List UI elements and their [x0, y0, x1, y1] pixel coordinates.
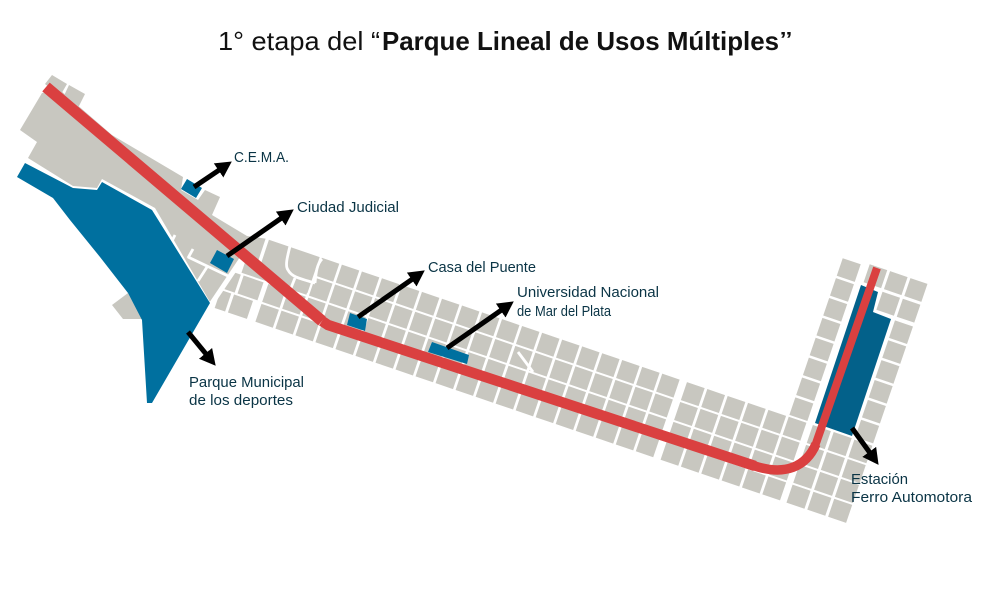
label: Universidad Nacional de Mar del Plata: Universidad Nacional — [517, 284, 659, 301]
label: Ciudad Judicial: Ciudad Judicial — [297, 199, 399, 216]
label: Estación Ferro Automotora: Estación — [851, 471, 908, 488]
blocks: northwest area — [20, 75, 268, 319]
map: urban fabric blocks — [20, 69, 927, 523]
arrow: Casa del Puente — [358, 278, 413, 317]
panel: Parque Municipal de los deportes area — [17, 163, 210, 403]
label: Estación Ferro Automotora — [851, 471, 973, 506]
label: Parque Municipal de los deportes — [189, 374, 304, 409]
label: Parque Municipal de los deportes: de los deportes — [189, 392, 293, 409]
arrow: Ciudad Judicial — [227, 217, 282, 256]
arrow: Universidad Nacional — [447, 309, 502, 348]
site: Ciudad Judicial — [210, 250, 234, 273]
arrow: Parque Municipal — [188, 332, 207, 355]
label: Estación Ferro Automotora: Ferro Automotora — [851, 489, 973, 506]
blocks: street grid — [215, 69, 927, 523]
title — [218, 26, 792, 56]
streets: white cuts — [172, 235, 533, 372]
label: Parque Municipal de los deportes: Parque Municipal — [189, 374, 304, 391]
title: Parque Lineal de Usos Múltiples — [382, 26, 779, 56]
arrow: C.E.M.A. — [194, 169, 220, 187]
title: 1° etapa del “ — [218, 26, 380, 56]
site: Universidad Nacional — [428, 342, 469, 364]
label: Casa del Puente: Casa del Puente — [428, 259, 536, 276]
label: Universidad Nacional de Mar del Plata — [517, 284, 659, 320]
arrow: Estación — [852, 428, 870, 454]
site: C.E.M.A. — [181, 179, 202, 198]
site: Casa del Puente — [347, 313, 367, 331]
panel: Estación Ferro Automotora area — [815, 285, 891, 436]
park route: red line — [46, 87, 877, 470]
label: C.E.M.A.: C.E.M.A. — [234, 149, 289, 166]
title: ” — [780, 26, 792, 56]
label: Universidad Nacional de Mar del Plata: de Mar del Plata — [517, 303, 612, 320]
